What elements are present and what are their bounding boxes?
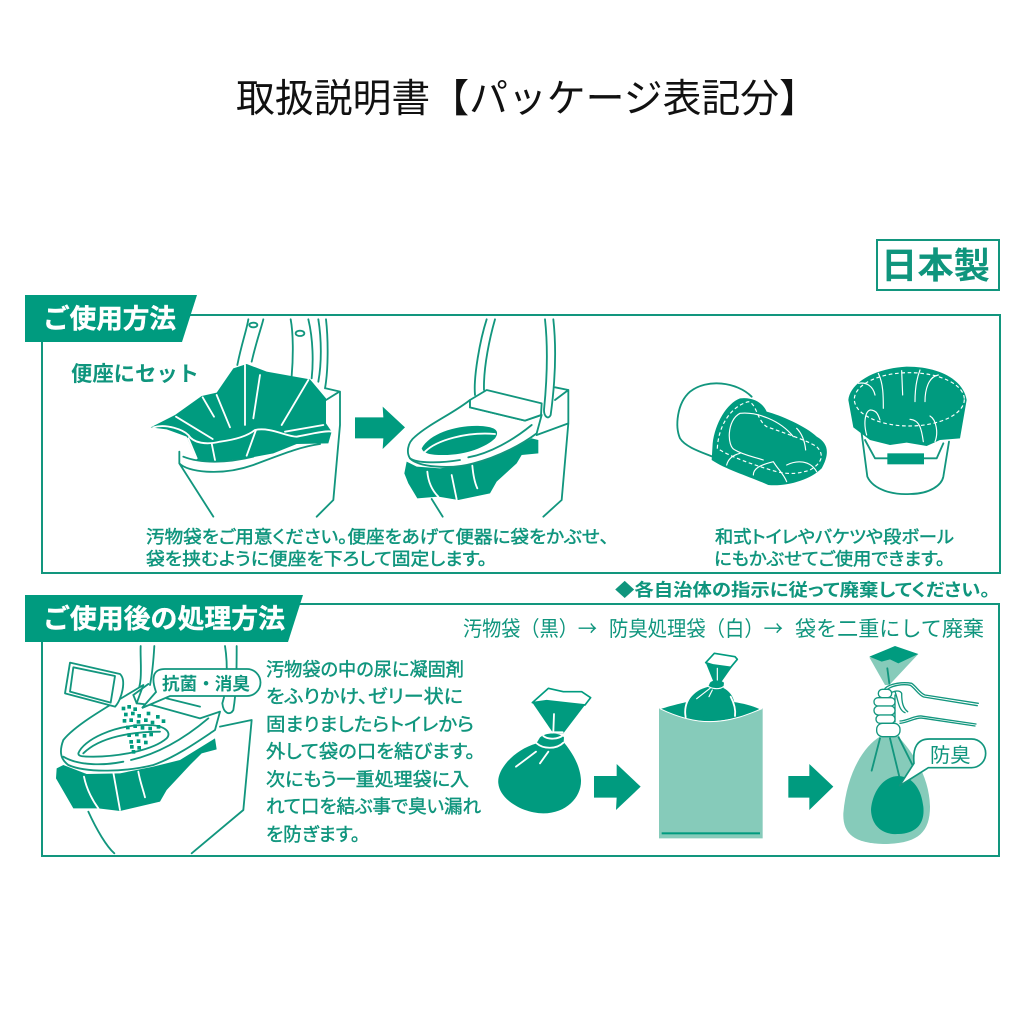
panel: how to use: [25, 295, 1000, 573]
text: instructions right: [714, 527, 954, 569]
callout: odor proof: [899, 739, 986, 786]
illustration: toilet with deodorant powder: [56, 646, 252, 853]
callout: antibacterial deodorant: 抗菌・消臭: [162, 674, 251, 694]
note: disposal rules: ◆各自治体の指示に従って廃棄してください。: [615, 580, 990, 600]
text: disposal flow: 防臭処理袋（白）→: [609, 613, 783, 643]
panel: disposal after use: [25, 595, 999, 856]
arrow: [788, 764, 833, 810]
heading: disposal: [25, 595, 303, 642]
text: disposal paragraph: 固まりましたらトイレから: [266, 714, 474, 735]
icon: hand: [874, 683, 978, 737]
text: disposal flow: 汚物袋（黒）→: [463, 613, 597, 643]
heading: how to use: ご使用方法: [43, 304, 177, 334]
text: disposal flow: 袋を二重にして廃棄: [795, 618, 984, 641]
text: disposal flow: [463, 613, 984, 643]
illustration: seat lowered over bag: [404, 319, 568, 517]
heading: disposal: ご使用後の処理方法: [43, 604, 286, 634]
illustration: tied bag: [498, 688, 591, 813]
illustration: bag in deodorizing sleeve: [659, 653, 763, 838]
illustration: squat toilet and bucket: [677, 367, 967, 494]
text: instructions left: 袋を挟むように便座を下ろして固定します。: [146, 549, 487, 569]
label: set on seat: 便座にセット: [71, 363, 199, 386]
arrow: [594, 764, 641, 810]
bucket: [848, 367, 967, 494]
text: instructions right: 和式トイレやバケツや段ボール: [715, 527, 954, 547]
text: disposal paragraph: [266, 659, 481, 845]
callout: antibacterial deodorant: [142, 669, 260, 708]
text: disposal paragraph: を防ぎます。: [266, 824, 360, 845]
text: disposal paragraph: 次にもう一重処理袋に入: [266, 769, 469, 790]
arrow: [355, 407, 405, 449]
text: instructions right: にもかぶせてご使用できます。: [714, 549, 945, 569]
title: 取扱説明書【パッケージ表記分】: [236, 78, 818, 121]
heading: how to use: [25, 295, 197, 342]
callout: odor proof: 防臭: [930, 744, 971, 767]
text: disposal paragraph: 汚物袋の中の尿に凝固剤: [266, 659, 464, 680]
text: disposal paragraph: をふりかけ、ゼリー状に: [266, 686, 463, 707]
illustration: bag placed on raised seat: [151, 319, 340, 517]
powder dots: [122, 705, 165, 754]
badge: made in Japan: 日本製: [881, 245, 990, 286]
illustration: double bagged held by hand: [843, 646, 986, 844]
text: instructions left: 汚物袋をご用意ください。便座をあげて便器に袋をかぶせ、: [146, 527, 609, 547]
icon: packet: [65, 663, 123, 707]
text: disposal paragraph: れて口を結ぶ事で臭い漏れ: [266, 796, 481, 817]
text: disposal paragraph: 外して袋の口を結びます。: [266, 741, 475, 762]
text: instructions left: [146, 527, 609, 569]
squat toilet: [677, 383, 827, 485]
